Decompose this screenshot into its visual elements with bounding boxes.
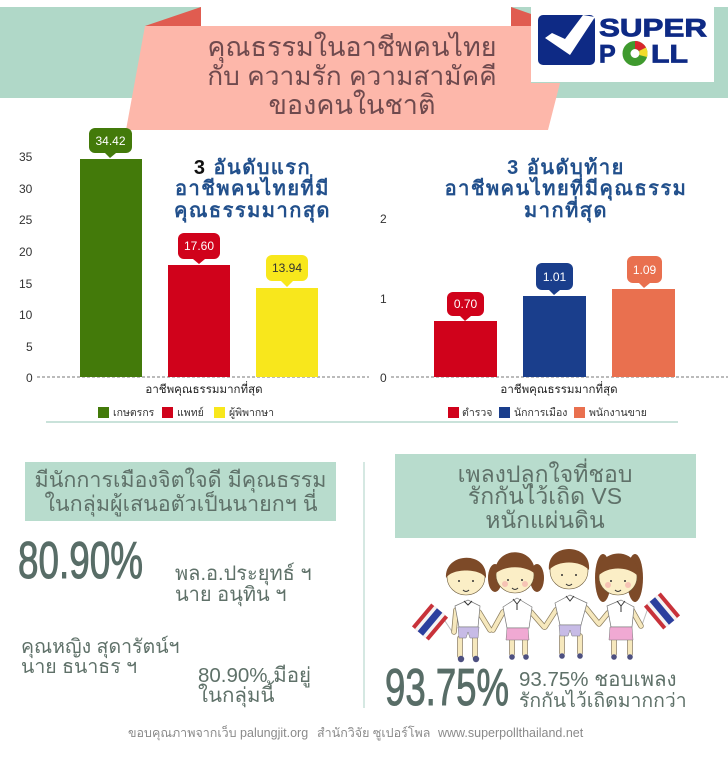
facial features xyxy=(458,574,626,582)
arms and legs skin xyxy=(454,608,641,656)
footer credits: ขอบคุณภาพจากเว็บ palungjit.org xyxy=(128,725,308,741)
panel: politicians with good morals xyxy=(18,462,336,708)
names: first group xyxy=(175,562,312,607)
shoes xyxy=(458,653,633,662)
right chart axis labels xyxy=(380,212,387,385)
names: second group: คุณหญิง สุดารัตน์ฯ xyxy=(21,635,179,659)
names: first group: นาย อนุทิน ฯ xyxy=(175,584,287,607)
left chart axis caption: อาชีพคุณธรรมมากที่สุด xyxy=(145,381,263,396)
title ribbon: คุณธรรมในอาชีพคนไทย xyxy=(207,31,497,64)
left chart legend: เกษตรกร xyxy=(113,407,155,419)
title ribbon xyxy=(126,7,560,130)
footer credits: www.superpollthailand.net xyxy=(437,726,584,740)
right chart legend: นักการเมือง xyxy=(514,406,567,419)
panel heading: มีนักการเมืองจิตใจดี มีคุณธรรม xyxy=(35,467,326,493)
stat: 93.75%: 93.75% xyxy=(385,659,509,717)
heading: top 3 occupations xyxy=(174,157,331,223)
bar: salespeople 1.09 xyxy=(612,256,675,377)
collars xyxy=(464,596,625,612)
panel heading: ในกลุ่มผู้เสนอตัวเป็นนายกฯ นี่ xyxy=(44,489,318,517)
panel heading: หนักแผ่นดิน xyxy=(485,507,605,533)
right chart axis labels: 0 xyxy=(380,371,387,385)
header band xyxy=(0,0,728,98)
panel heading: รักกันไว้เถิด VS xyxy=(468,483,622,509)
left chart axis labels: 20 xyxy=(19,245,33,259)
cheeks xyxy=(502,581,631,588)
heading: bottom 3 occupations xyxy=(445,156,687,223)
footer credits: สำนักวิจัย ซูเปอร์โพล xyxy=(317,725,430,741)
smiles xyxy=(463,584,621,592)
right chart axis labels: 2 xyxy=(380,212,387,226)
left bar chart: top 3 xyxy=(19,128,369,419)
panel heading xyxy=(25,462,336,521)
left chart axis labels: 35 xyxy=(19,150,33,164)
left chart axis labels: 30 xyxy=(19,182,33,196)
panel heading xyxy=(395,454,696,538)
hair xyxy=(446,549,638,578)
title ribbon: ของคนในชาติ xyxy=(268,89,436,120)
faces xyxy=(447,553,637,595)
logo: Super Poll: SUPER xyxy=(599,14,707,42)
heading: bottom 3 occupations: มากที่สุด xyxy=(524,195,608,223)
note: prefer this song xyxy=(519,668,687,712)
right bar chart: bottom 3 xyxy=(380,212,728,419)
logo: Super Poll xyxy=(531,0,714,82)
bar: farmers 34.42 xyxy=(80,128,142,377)
bar: doctors 17.60 xyxy=(168,233,230,377)
note: prefer this song: 93.75% ชอบเพลง xyxy=(519,668,677,691)
heading: top 3 occupations: อาชีพคนไทยที่มี xyxy=(175,173,330,200)
panel: favourite patriotic song xyxy=(385,454,696,717)
note: 80.90% in this group: 80.90% มีอยู่ xyxy=(198,664,311,688)
right chart legend xyxy=(448,406,647,419)
bar: judges 13.94: 13.94 xyxy=(272,261,302,275)
names: second group xyxy=(21,635,179,678)
right chart legend: พนักงานขาย xyxy=(589,407,647,419)
left chart axis labels: 15 xyxy=(19,277,33,291)
names: first group: พล.อ.ประยุทธ์ ฯ xyxy=(175,562,312,586)
left chart axis labels: 0 xyxy=(26,371,33,385)
shirts xyxy=(455,595,634,628)
logo: Super Poll: LL xyxy=(651,40,688,68)
title ribbon: กับ ความรัก ความสามัคคี xyxy=(207,61,497,91)
note: 80.90% in this group xyxy=(198,664,311,708)
bar: salespeople 1.09: 1.09 xyxy=(633,263,657,277)
flag: left xyxy=(412,603,448,641)
bar: politicians 1.01 xyxy=(523,263,586,377)
note: 80.90% in this group: ในกลุ่มนี้ xyxy=(198,680,275,708)
left chart axis labels: 10 xyxy=(19,308,33,322)
panel heading: เพลงปลุกใจที่ชอบ xyxy=(458,458,632,488)
left chart legend: ผู้พิพากษา xyxy=(229,407,274,419)
heading: top 3 occupations: 3 อันดับแรก xyxy=(194,157,311,179)
logo: Super Poll: P xyxy=(599,40,616,68)
shorts and skirts xyxy=(458,627,479,638)
bar: farmers 34.42: 34.42 xyxy=(95,134,126,148)
bar: judges 13.94 xyxy=(256,255,318,377)
girls' side hair xyxy=(488,554,643,602)
flag sticks xyxy=(443,608,648,633)
left chart legend xyxy=(98,406,274,419)
flag: right xyxy=(644,592,680,630)
arms and legs outline xyxy=(454,608,641,656)
right chart axis labels: 1 xyxy=(380,292,387,306)
bar: police 0.70: 0.70 xyxy=(454,297,478,311)
bar: police 0.70 xyxy=(434,292,497,377)
left chart axis labels xyxy=(19,150,33,385)
bar: doctors 17.60: 17.60 xyxy=(184,239,214,253)
left chart legend: แพทย์ xyxy=(177,406,204,419)
heading: top 3 occupations: คุณธรรมมากสุด xyxy=(174,200,331,223)
illustration: four children holding hands with Thai flags xyxy=(412,549,680,662)
right chart axis caption: อาชีพคุณธรรมมากที่สุด xyxy=(500,381,618,396)
heading: bottom 3 occupations: อาชีพคนไทยที่มีคุณธรรม xyxy=(445,173,687,201)
bar: politicians 1.01: 1.01 xyxy=(543,270,567,284)
left chart axis labels: 25 xyxy=(19,213,33,227)
left chart axis labels: 5 xyxy=(26,340,33,354)
names: second group: นาย ธนาธร ฯ xyxy=(21,656,137,678)
note: prefer this song: รักกันไว้เถิดมากกว่า xyxy=(519,689,687,712)
heading: bottom 3 occupations: 3 อันดับท้าย xyxy=(507,156,625,179)
stat: 80.90%: 80.90% xyxy=(18,532,143,590)
right chart legend: ตำรวจ xyxy=(462,407,492,419)
